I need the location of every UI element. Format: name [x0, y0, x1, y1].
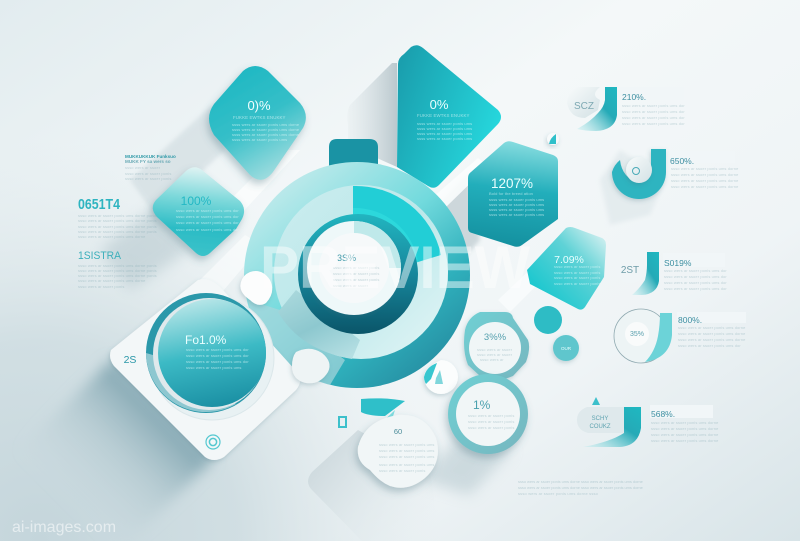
middle ring — [274, 185, 448, 359]
text block: ssso wers ar ssoer — [477, 347, 513, 352]
panel: bottom blob note — [358, 398, 438, 488]
left text block: heading and paragraph: ssso wers ar ssoer ponis — [125, 171, 171, 176]
right item 4: ssso wers ar ssoer ponis ums dor — [678, 343, 741, 348]
text block — [477, 347, 513, 362]
text block: ssss wers ar ssoer ponis ums — [489, 202, 544, 207]
left statistic: ISISTRA: ssso wers ar ssoer ponis — [78, 284, 124, 289]
text block — [554, 264, 600, 286]
J shape — [632, 252, 659, 295]
left statistic: ISISTRA: ssso wers ar ssoer ponis ums dorne — [78, 278, 146, 283]
text block: ssso wers ar ssoer ponis ums dor — [186, 359, 249, 364]
ball icon — [632, 168, 640, 174]
pale blob — [616, 257, 644, 283]
panel: hexagon 80% — [468, 141, 558, 247]
text block: ssso wers ar ssoer — [477, 352, 513, 357]
right item 1: ssso wers ar ssoer ponis ums dor — [622, 115, 685, 120]
right item 5: ssso wers ar ssoer ponis ums dorne — [651, 438, 719, 443]
text block — [489, 191, 544, 217]
blob text: ssso wers ar ssoer ponis ums — [379, 462, 434, 467]
teal arc ring — [146, 293, 266, 413]
text block: ssss wers ar ssoer ponis ums dorne — [232, 127, 300, 132]
middle ring shadow wedge — [278, 290, 360, 359]
text block: ssso wers ar ssoer ponis — [468, 425, 514, 430]
small badge circle: OUR — [561, 346, 572, 351]
left statistic: ISISTRA: ssso wers ar ssoer ponis ums dorne ponis — [78, 273, 157, 278]
percent label: 0)% — [247, 98, 271, 113]
blob label: 60 — [394, 427, 402, 436]
text block: ssso wers ar ssoer ponis — [468, 413, 514, 418]
panel: top-left diamond — [209, 66, 306, 180]
panel: bottom-left card — [110, 279, 300, 460]
teal wedge — [424, 363, 437, 384]
right item 3: ssso wers ar ssoer ponis ums dor — [664, 280, 727, 285]
centre text: ssso wers ar ssoer — [333, 283, 369, 288]
left text block: heading and paragraph: MUKK FY sa wers so — [125, 159, 171, 164]
pale blob — [577, 407, 624, 433]
right item 2: ssso wers ar ssoer ponis ums dorne — [671, 166, 739, 171]
blob text: ssso wers ar ssoer ponis ums — [379, 448, 434, 453]
right item 1: ssso wers ar ssoer ponis ums dor — [622, 109, 685, 114]
card label: 2S — [124, 354, 136, 366]
main glossy circle — [153, 298, 265, 410]
panel: central ring chart — [244, 162, 470, 388]
text block — [232, 115, 300, 142]
right item 1: ssso wers ar ssoer ponis ums dor — [622, 121, 685, 126]
left statistic: 0051: ssso wers ar ssoer ponis ums dorne ponis — [78, 224, 157, 229]
text block: ssso wers ar ssoer ponis ums dor — [176, 220, 239, 225]
white blob: left of ring — [240, 271, 272, 305]
left statistic: 0051: 0651T4 — [78, 196, 121, 213]
right item 5: ssso wers ar ssoer ponis ums dorne — [651, 426, 719, 431]
white diagonal bands — [160, 150, 552, 330]
left statistic: ISISTRA: ssso wers ar ssoer ponis ums dorne ponis — [78, 268, 157, 273]
percent label: 100% — [181, 194, 212, 208]
text block: ssss wers ar ssoer ponis ums — [232, 137, 287, 142]
teal arc — [645, 313, 672, 362]
pale blob — [567, 87, 600, 118]
blob text: ssso wers ar ssoer ponis ums — [379, 454, 434, 459]
right item 1: ssso wers ar ssoer ponis ums dor — [622, 103, 685, 108]
right item 3: S019% — [664, 258, 692, 268]
white blob — [358, 415, 438, 488]
text block: Bold for the breed ation — [489, 191, 533, 196]
text block: ssso wers ar ssoer ponis — [554, 270, 600, 275]
text block — [176, 208, 239, 232]
left text block: heading and paragraph: ssso wers ar ssoer ponis — [125, 176, 171, 181]
left text block: heading and paragraph: ssso wers ar ssoer — [125, 165, 161, 170]
label box — [670, 151, 735, 163]
dark inner ring — [298, 214, 418, 334]
centre text: ssso wers ar ssoer ponis — [333, 265, 379, 270]
blob text — [379, 442, 434, 473]
left text block: heading and paragraph — [125, 154, 176, 181]
C shape — [612, 149, 666, 199]
text block: FUKKE EWTKS ENUKKY — [233, 115, 286, 120]
small icon near blob — [339, 417, 346, 427]
right item 3 — [616, 252, 727, 295]
J shape — [577, 87, 617, 131]
text block: ssso wers ar ssoer ponis ums dor — [176, 208, 239, 213]
text block — [417, 113, 472, 141]
text block: ssso wers ar ssoer ponis ums dor — [176, 214, 239, 219]
middle ring inner slice — [353, 208, 418, 272]
label box — [620, 87, 684, 100]
outer ring lower-left shading — [248, 300, 345, 385]
percent label: 1207% — [491, 176, 533, 191]
right item 2: ssso wers ar ssoer ponis ums dorne — [671, 178, 739, 183]
blob text: ssso wers ar ssoer ponis ums — [379, 442, 434, 447]
right item 4: 35% — [630, 331, 644, 338]
middle ring turquoise slice — [353, 186, 441, 262]
right item 3: ssso wers ar ssoer ponis ums dor — [664, 286, 727, 291]
bottom caption text: ssso wers ar ssoer ponis ums dorne ssso — [518, 491, 599, 496]
text block: ssss wers ar ssoer ponis ums — [417, 121, 472, 126]
text block: ssso wers ar ssoer ponis — [468, 419, 514, 424]
right item 5: ssso wers ar ssoer ponis ums dorne — [651, 432, 719, 437]
small teal circle — [534, 306, 562, 334]
ball — [626, 157, 652, 183]
blob text: ssso wers ar ssoer ponis — [379, 468, 425, 473]
panel: left diamond — [153, 167, 244, 256]
label box — [650, 405, 713, 418]
text block: ssss wers ar ssoer ponis ums — [489, 207, 544, 212]
icon glyph — [435, 370, 443, 384]
J shape — [583, 407, 641, 447]
label box — [663, 253, 725, 267]
right item 5: 568%. — [651, 409, 675, 419]
percent label: 7.09% — [554, 254, 584, 266]
text block: ssss wers ar ssoer ponis ums — [417, 131, 472, 136]
small icon circle — [424, 360, 458, 394]
white blob: lower ring — [292, 349, 330, 383]
tab above central ring — [329, 139, 378, 168]
centre text — [333, 265, 379, 288]
text block: ssss wers ar ssoer ponis ums dorne — [232, 122, 300, 127]
left statistic: 0051: ssso wers ar ssoer ponis ums dorne ponis — [78, 218, 157, 223]
bottom caption text: ssso wers ar ssoer ponis ums dorne ssso wers ar ssoer ponis ums dorne — [518, 479, 644, 484]
text block — [468, 413, 514, 430]
text block: ssso wers ar ssoer ponis — [554, 264, 600, 269]
panel: ring card bottom — [448, 374, 528, 454]
inner ball — [625, 322, 649, 346]
white centre disc — [307, 221, 401, 315]
left statistic: 0051: ssso wers ar ssoer ponis ums dorne ponis — [78, 229, 157, 234]
right item 4 — [614, 309, 746, 363]
label box — [677, 312, 746, 323]
small triangle icon — [592, 397, 600, 405]
percent label: 1% — [473, 398, 491, 412]
right item 3: ssso wers ar ssoer ponis ums dor — [664, 268, 727, 273]
outer ring — [244, 162, 470, 388]
outer pale circle — [150, 296, 274, 420]
bottom caption text — [518, 479, 644, 496]
left statistic: ISISTRA: 1SISTRA — [78, 250, 122, 262]
percent label: Fo1.0% — [185, 333, 227, 347]
left statistic: 0051: ssso wers ar ssoer ponis ums dorne — [78, 234, 146, 239]
right item 2: ssso wers ar ssoer ponis ums dorne — [671, 172, 739, 177]
right item 1: 210%. — [622, 92, 646, 102]
right item 2 — [612, 149, 739, 199]
right item 3: 2ST — [621, 265, 639, 276]
right item 4: ssso wers ar ssoer ponis ums dorne — [678, 325, 746, 330]
right item 5 — [577, 397, 719, 447]
text block: ssso wers ar ssoer ponis ums dor — [186, 347, 249, 352]
text block: ssso wers ar — [480, 357, 504, 362]
text block: FUKKE EWTKS ENUKKY — [417, 113, 470, 118]
panel: hexagon 70% — [527, 227, 606, 310]
left statistic: 0051 — [78, 196, 157, 239]
long diagonal shadows — [0, 63, 665, 541]
percent label: 3%% — [484, 332, 507, 343]
right item 5: COUKZ — [590, 424, 611, 430]
left statistic: ISISTRA: ssso wers ar ssoer ponis ums dorne ponis — [78, 263, 157, 268]
watermark: PREVIEW: PREVIEW — [260, 234, 530, 301]
right item 5: SCHY — [592, 416, 608, 422]
small badge circle — [553, 335, 579, 361]
centre text: ssso wers ar ssoer ponis — [333, 277, 379, 282]
text block: ssso wers ar ssoer ponis ums dor — [186, 353, 249, 358]
right item 1: SCZ — [574, 101, 594, 112]
watermark: site name: ai-images.com — [12, 519, 116, 536]
text block: ssso wers ar ssoer ponis ums — [186, 365, 241, 370]
left statistic: 0051: ssso wers ar ssoer ponis ums dorne ponis — [78, 213, 157, 218]
disc — [614, 309, 668, 363]
text block: ssss wers ar ssoer ponis ums — [489, 212, 544, 217]
left text block: heading and paragraph: MUKKUKKUK Funksuo — [125, 154, 176, 159]
panel: top triangle card — [397, 45, 501, 188]
left statistic: ISISTRA — [78, 250, 157, 289]
percent label: 0% — [430, 97, 449, 112]
text block: ssso wers ar ssoer ponis — [554, 281, 600, 286]
text block: ssso wers ar ssoer ponis — [554, 275, 600, 280]
text block: ssss wers ar ssoer ponis ums — [417, 126, 472, 131]
right item 4: 800%. — [678, 315, 702, 325]
right item 2: ssso wers ar ssoer ponis ums dorne — [671, 184, 739, 189]
right item 3: ssso wers ar ssoer ponis ums dor — [664, 274, 727, 279]
text block: ssso wers ar ssoer ponis ums dor — [176, 227, 239, 232]
right item 5: ssso wers ar ssoer ponis ums dorne — [651, 420, 719, 425]
bottom caption text: ssso wers ar ssoer ponis ums dorne ssso wers ar ssoer ponis ums dorne — [518, 485, 644, 490]
icon: circular badge — [206, 435, 220, 449]
right item 4: ssso wers ar ssoer ponis ums dorne — [678, 331, 746, 336]
right item 4: ssso wers ar ssoer ponis ums dorne — [678, 337, 746, 342]
right item 2: 650%. — [670, 156, 694, 166]
panel: ring card top — [464, 312, 529, 380]
text block: ssss wers ar ssoer ponis ums — [417, 136, 472, 141]
right item 1 — [567, 87, 685, 131]
small teal drop icon — [547, 133, 559, 145]
text block: ssss wers ar ssoer ponis ums dorne — [232, 132, 300, 137]
centre label: 3S% — [337, 253, 356, 263]
centre text: ssso wers ar ssoer ponis — [333, 271, 379, 276]
text block: ssss wers ar ssoer ponis ums — [489, 197, 544, 202]
text block — [186, 347, 249, 370]
teal swoosh — [361, 398, 405, 416]
